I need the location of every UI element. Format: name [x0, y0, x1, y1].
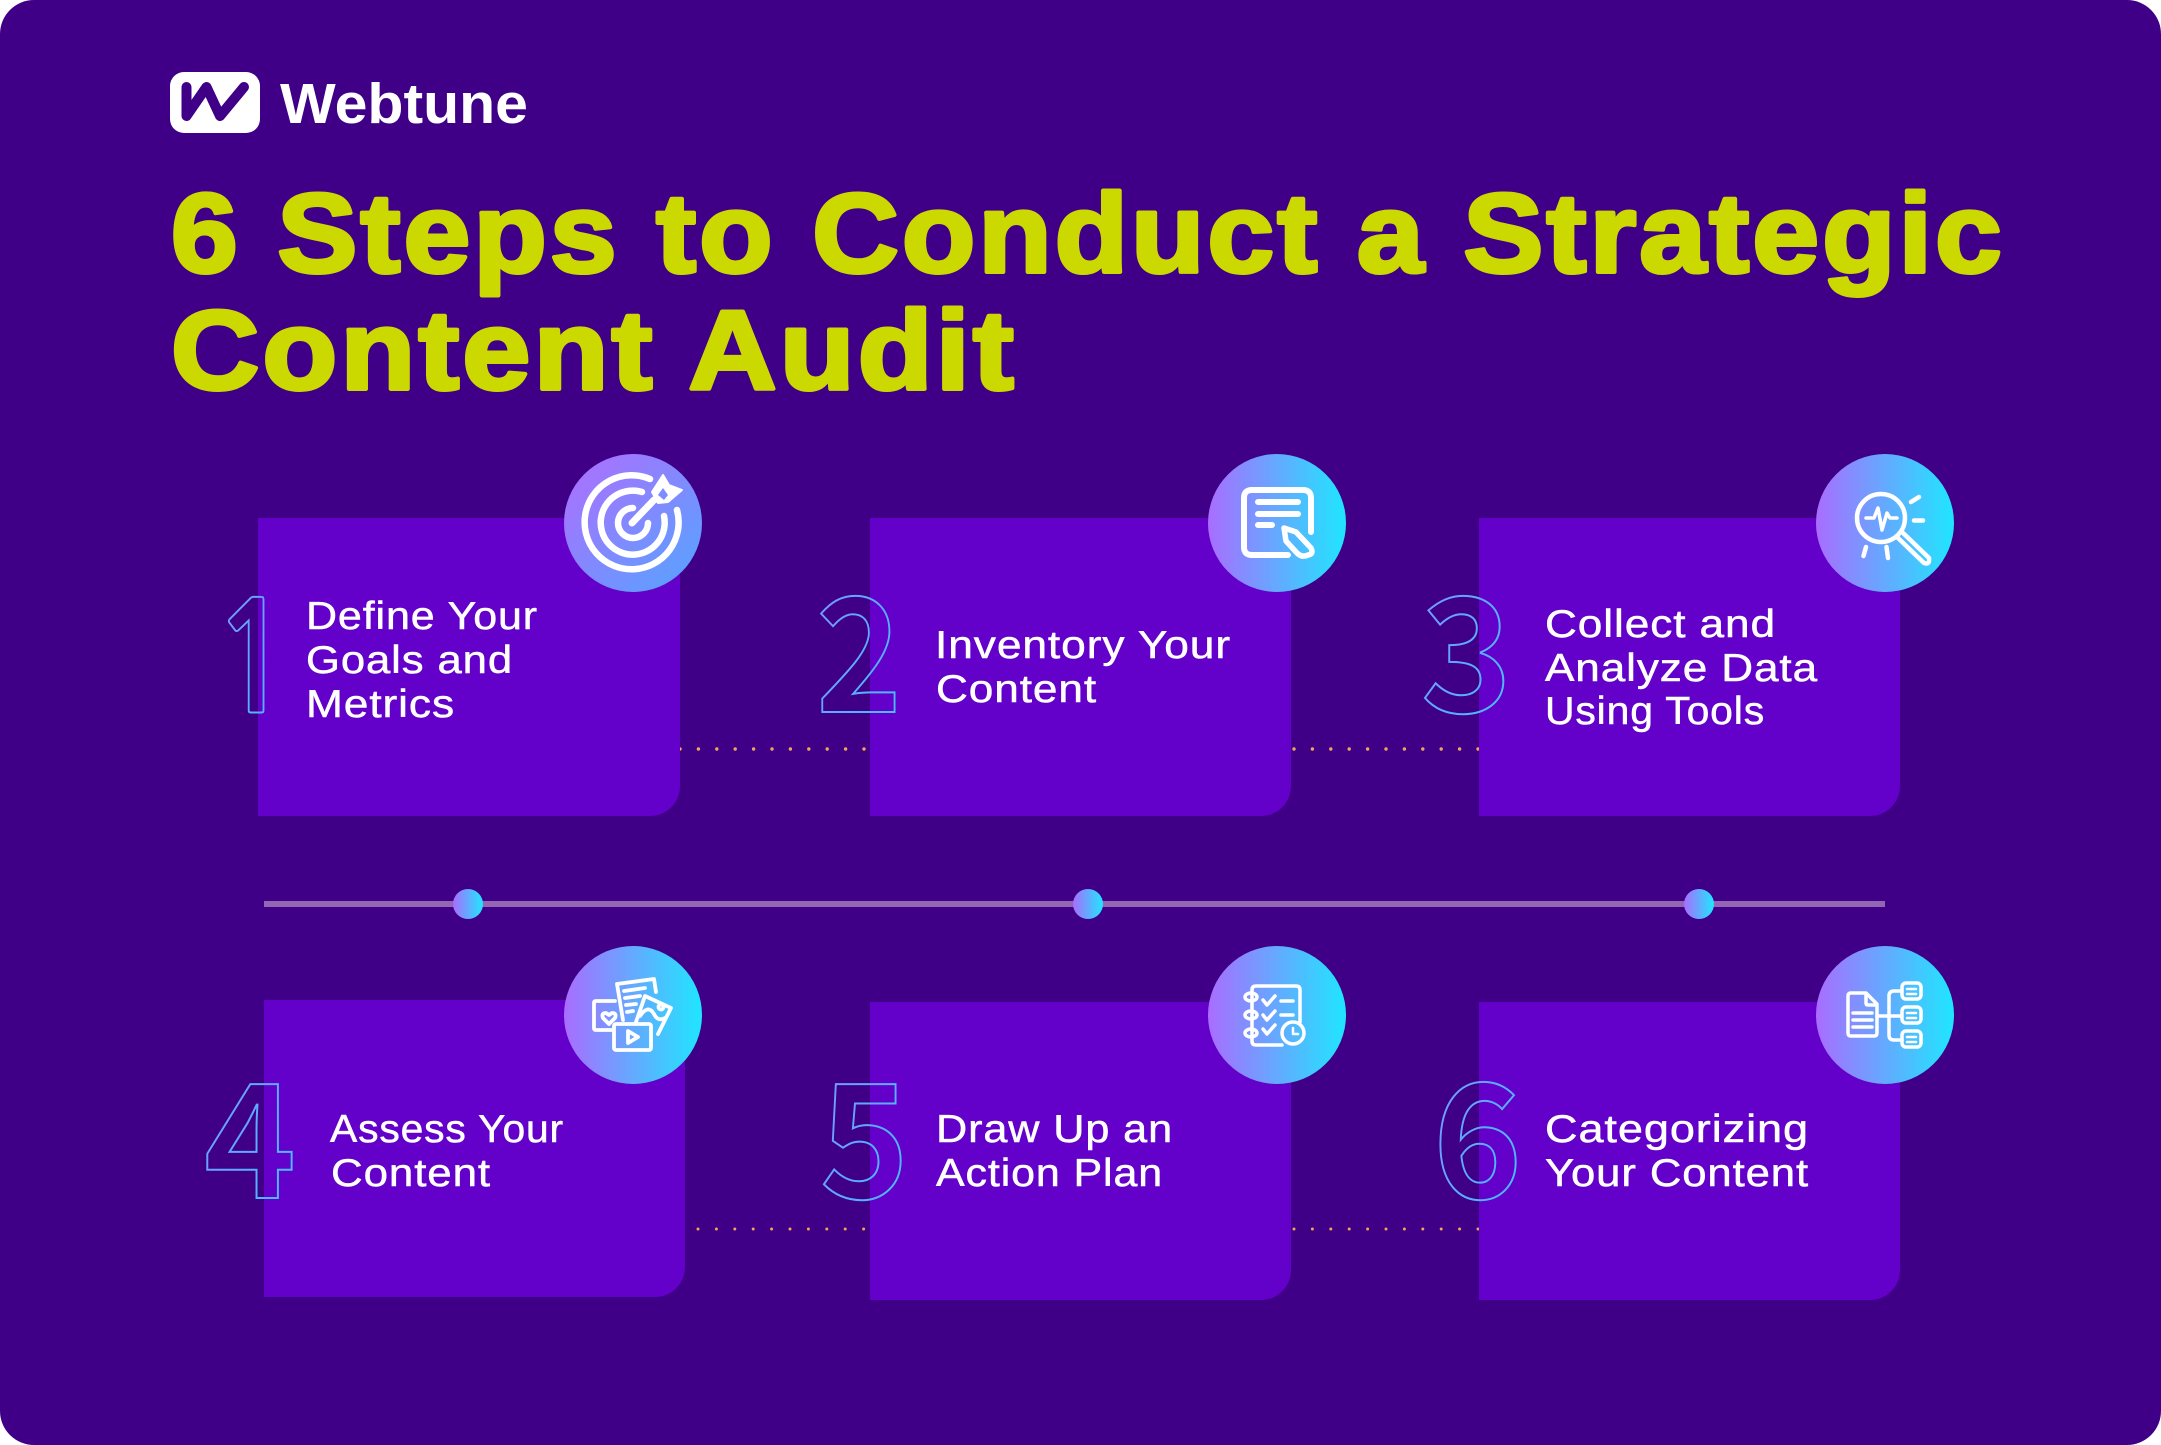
panel: step 6: 6 [1433, 1015, 1522, 1244]
panel: step 1 [211, 454, 702, 816]
icon: document with pencil [1244, 490, 1312, 556]
title: 6 Steps to Conduct a Strategic [171, 171, 2005, 296]
panel: step 2 [816, 454, 1346, 816]
title: Content Audit [171, 288, 1017, 413]
panel: step 3: 3 [1421, 529, 1512, 758]
panel: step 5: Draw Up an [936, 1108, 1173, 1151]
dotted connectors: top row [680, 747, 1480, 751]
icon: media content collage [594, 979, 671, 1050]
panel: step 5: Action Plan [936, 1152, 1163, 1195]
panel: step 4 [204, 946, 702, 1297]
panel: step 2: 2 [816, 529, 902, 758]
title [171, 171, 2005, 413]
icon: target with arrow [585, 475, 682, 569]
panel: step 6: Categorizing [1545, 1108, 1809, 1151]
panel: step 6 [1433, 946, 1954, 1300]
panel: step 3: Analyze Data [1545, 647, 1818, 690]
icon: magnifier with pulse [1857, 494, 1929, 563]
panel: step 1: Metrics [306, 683, 455, 726]
panel: step 4: 4 [204, 1015, 296, 1244]
panel: step 4: Assess Your [330, 1108, 564, 1151]
icon: document hierarchy [1848, 983, 1921, 1047]
panel: step 6: Your Content [1545, 1152, 1809, 1195]
icon: checklist with clock [1245, 986, 1304, 1045]
panel: step 1: 1 [211, 584, 295, 735]
panel: step 1: Define Your [306, 595, 538, 638]
timeline divider with nodes [264, 889, 1885, 919]
logo: Webtune [170, 72, 528, 136]
dotted connectors: bottom row [698, 1228, 1480, 1230]
panel: step 3: Using Tools [1545, 690, 1765, 733]
panel: step 3: Collect and [1545, 603, 1776, 646]
panel: step 2: Content [936, 668, 1097, 711]
panel: step 5: 5 [820, 1015, 909, 1244]
panel: step 3 [1421, 454, 1954, 816]
logo: Webtune: Webtune [280, 72, 528, 136]
panel: step 2: Inventory Your [935, 624, 1231, 667]
panel: step 5 [820, 946, 1346, 1300]
panel: step 1: Goals and [306, 639, 513, 682]
panel: step 4: Content [331, 1152, 491, 1195]
